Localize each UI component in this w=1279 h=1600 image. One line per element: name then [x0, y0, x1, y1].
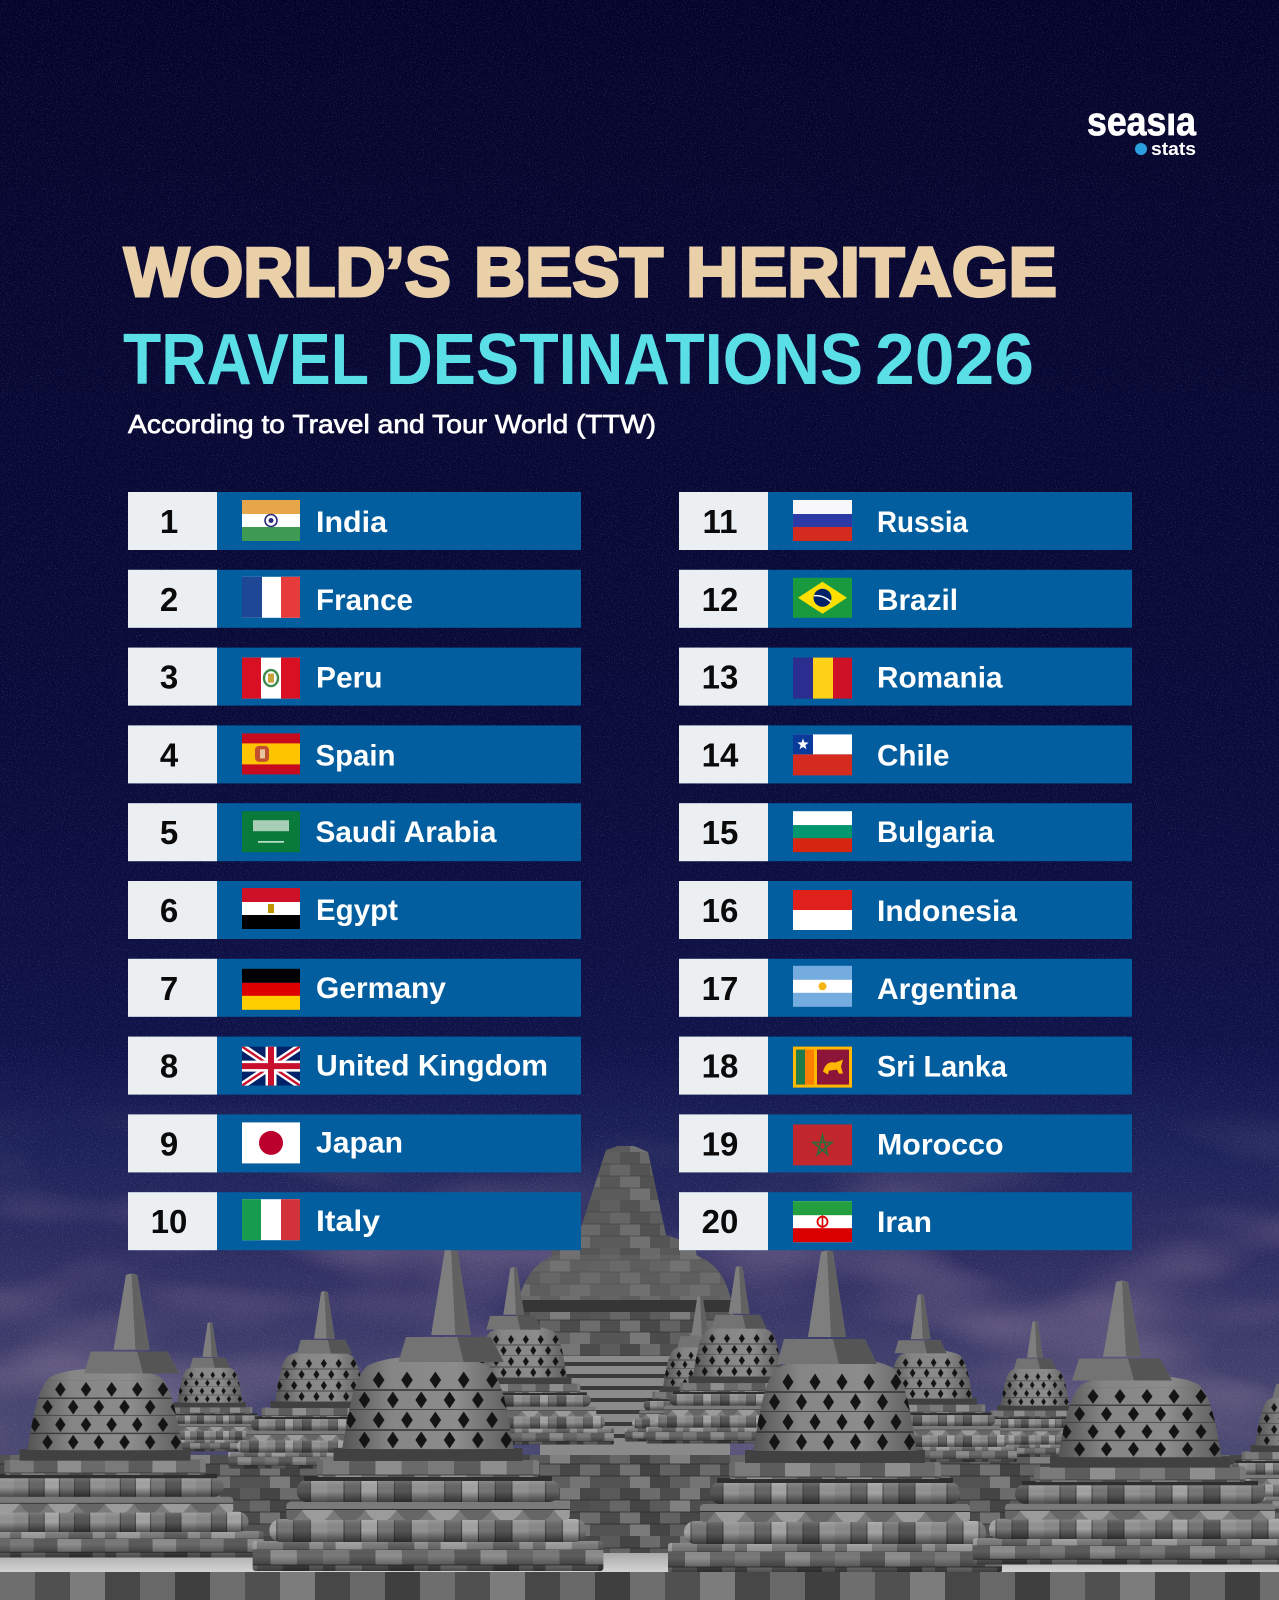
flag: Italy — [242, 1199, 300, 1240]
ranking column: 1 to 10 — [128, 492, 581, 1250]
country: Sri Lanka: Sri Lanka — [877, 1051, 1007, 1084]
title line 2: DESTINATIONS — [386, 319, 863, 400]
title line 1: HERITAGE — [686, 233, 1057, 311]
rank 4 — [128, 725, 217, 783]
flag: Chile — [793, 734, 852, 775]
rank 19 — [679, 1114, 768, 1172]
rank 2 — [128, 570, 217, 628]
rank 5: 5 — [160, 814, 178, 851]
row 12: Brazil — [679, 570, 1132, 628]
rank 17 — [679, 959, 768, 1017]
rank 14 — [679, 725, 768, 783]
rank 5 — [128, 803, 217, 861]
rank 1 — [128, 492, 217, 550]
country: Saudi Arabia: Saudi Arabia — [316, 816, 497, 849]
country: Russia: Russia — [877, 506, 968, 539]
rank 16: 16 — [702, 892, 738, 929]
rank 17: 17 — [702, 970, 738, 1007]
front large stupas — [0, 1248, 1279, 1573]
flag: Brazil — [793, 578, 852, 618]
row 6: Egypt — [128, 881, 581, 939]
title line 2: 2026 — [875, 319, 1034, 400]
country: Romania: Romania — [877, 662, 1003, 695]
rank 14: 14 — [702, 736, 739, 773]
row 9: Japan — [128, 1114, 581, 1172]
rank 20 — [679, 1192, 768, 1250]
flag: Egypt — [242, 888, 300, 929]
country: Peru: Peru — [316, 662, 382, 695]
title line 2 — [123, 319, 1034, 400]
terrace brick wall — [0, 1455, 1279, 1560]
flag: Argentina — [793, 966, 852, 1007]
flag: France — [242, 577, 300, 618]
row 11: Russia — [679, 492, 1132, 550]
country: Egypt: Egypt — [316, 894, 398, 927]
title line 1: BEST — [474, 233, 663, 311]
row 20: Iran — [679, 1192, 1132, 1250]
flag: Spain — [242, 733, 300, 774]
row 16: Indonesia — [679, 881, 1132, 939]
row 4: Spain — [128, 725, 581, 783]
country: Brazil: Brazil — [877, 584, 958, 617]
rank 6: 6 — [160, 892, 178, 929]
rank 18 — [679, 1037, 768, 1095]
back stupas — [143, 1267, 1279, 1513]
rank 7 — [128, 959, 217, 1017]
rank 15: 15 — [702, 814, 738, 851]
logo: seasia stats — [1088, 113, 1197, 155]
rank 16 — [679, 881, 768, 939]
rank 20: 20 — [702, 1203, 738, 1240]
rank 8: 8 — [160, 1048, 178, 1085]
flag: Saudi Arabia — [242, 811, 300, 852]
rank 4: 4 — [160, 736, 179, 773]
flag: Peru — [242, 658, 300, 699]
rank 15 — [679, 803, 768, 861]
main central stupa — [510, 1146, 738, 1456]
row 7: Germany — [128, 959, 581, 1017]
rank 9: 9 — [160, 1125, 178, 1162]
rank 12 — [679, 570, 768, 628]
ground platform — [0, 1553, 1279, 1573]
country: United Kingdom: United Kingdom — [316, 1050, 548, 1083]
rank 7: 7 — [160, 970, 178, 1007]
rank 3 — [128, 648, 217, 706]
country: Indonesia: Indonesia — [877, 895, 1017, 928]
country: Germany: Germany — [316, 972, 446, 1005]
foreground brick wall — [0, 1572, 1279, 1600]
background: purple clouds — [0, 1126, 1279, 1455]
flag: Japan — [242, 1122, 300, 1163]
country: Chile: Chile — [877, 739, 950, 772]
row 13: Romania — [679, 648, 1132, 706]
logo: seasia stats: seasia — [1087, 100, 1197, 144]
row 1: India — [128, 492, 581, 550]
ranking column: 11 to 20 — [679, 492, 1132, 1250]
flag: Iran — [793, 1201, 852, 1242]
country: Italy: Italy — [316, 1205, 380, 1238]
row 5: Saudi Arabia — [128, 803, 581, 861]
rank 12: 12 — [702, 581, 738, 618]
row 17: Argentina — [679, 959, 1132, 1017]
row 8: United Kingdom — [128, 1037, 581, 1095]
flag: Germany — [242, 969, 300, 1010]
rank 19: 19 — [702, 1125, 738, 1162]
row 2: France — [128, 570, 581, 628]
rank 10: 10 — [151, 1203, 187, 1240]
country: Morocco: Morocco — [877, 1128, 1004, 1161]
rank 10 — [128, 1192, 217, 1250]
country: India: India — [316, 506, 387, 539]
flag: Bulgaria — [793, 811, 852, 852]
middle stupas — [228, 1266, 1017, 1469]
country: Japan: Japan — [316, 1126, 403, 1159]
row 18: Sri Lanka — [679, 1037, 1132, 1095]
flag: India — [242, 500, 300, 541]
rank 3: 3 — [160, 659, 178, 696]
country: Spain: Spain — [316, 739, 396, 772]
row 19: Morocco — [679, 1114, 1132, 1172]
row 3: Peru — [128, 648, 581, 706]
rank 6 — [128, 881, 217, 939]
rank 18: 18 — [702, 1048, 738, 1085]
title line 1: WORLD’S — [124, 233, 451, 311]
flag: Indonesia — [793, 890, 852, 930]
row 10: Italy — [128, 1192, 581, 1250]
flag: Romania — [793, 658, 852, 699]
country: France: France — [316, 584, 413, 617]
country: Argentina: Argentina — [877, 973, 1017, 1006]
title line 2: TRAVEL — [123, 319, 369, 400]
country: Iran: Iran — [877, 1206, 932, 1239]
flag: Russia — [793, 500, 852, 541]
logo: seasia stats: stats — [1151, 139, 1196, 159]
rank 9 — [128, 1114, 217, 1172]
country: Bulgaria: Bulgaria — [877, 816, 994, 849]
row 14: Chile — [679, 725, 1132, 783]
rank 11 — [679, 492, 768, 550]
title line 1 — [124, 233, 1057, 311]
flag: United Kingdom — [242, 1046, 300, 1086]
rank 8 — [128, 1037, 217, 1095]
rank 11: 11 — [703, 503, 737, 540]
row 15: Bulgaria — [679, 803, 1132, 861]
flag: Sri Lanka — [793, 1047, 852, 1088]
rank 1: 1 — [160, 503, 178, 540]
flag: Morocco — [793, 1124, 852, 1165]
rank 2: 2 — [160, 581, 178, 618]
rank 13 — [679, 648, 768, 706]
illustration: Borobudur temple stupas — [0, 1146, 1279, 1600]
rank 13: 13 — [702, 659, 738, 696]
subtitle: According to Travel and Tour World (TTW) — [128, 409, 656, 439]
